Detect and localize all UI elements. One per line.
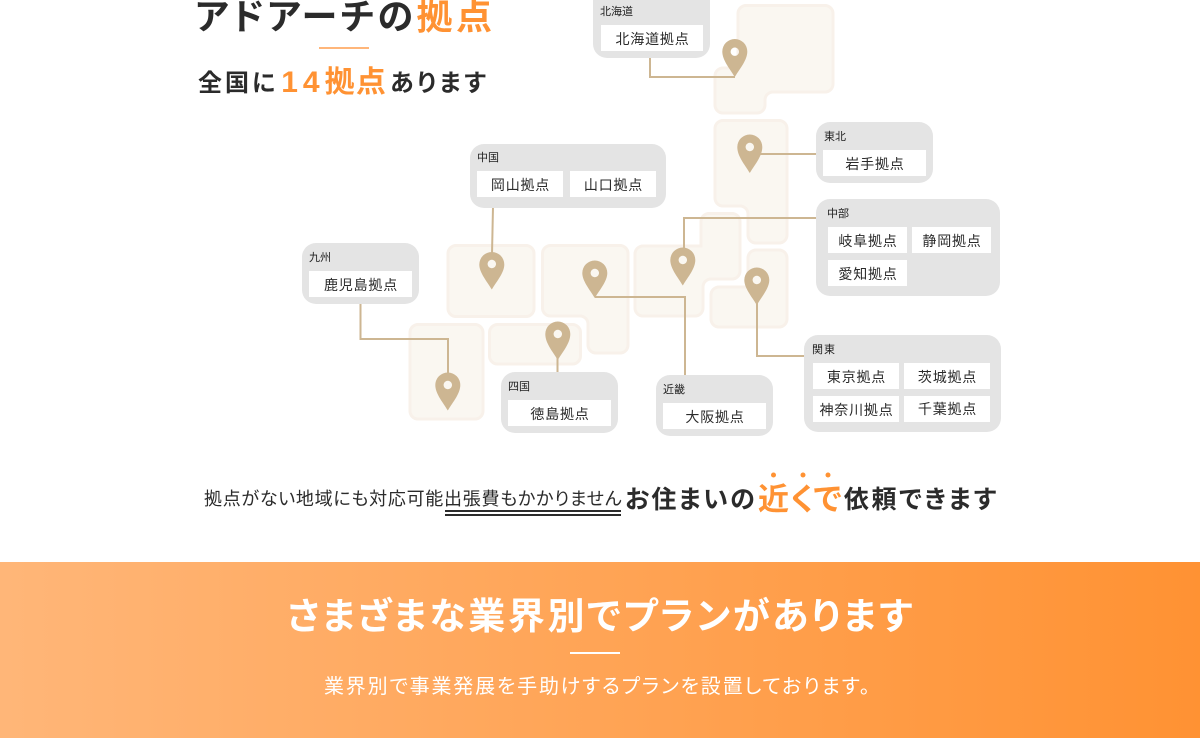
pin tohoku xyxy=(737,134,762,173)
subtitle: 14 locations: あります xyxy=(390,70,489,97)
office: iwate xyxy=(823,150,926,176)
office: aichi: 愛知拠点 xyxy=(838,266,898,282)
banner text: 業界別で事業発展を手助けするプランを設置しております。 xyxy=(324,676,871,698)
line chubu xyxy=(684,218,818,250)
label: shikoku: 四国 xyxy=(508,381,530,393)
office: kagoshima xyxy=(309,271,412,297)
line kanto xyxy=(757,300,805,356)
kyushu shape xyxy=(410,324,483,419)
double underline xyxy=(445,510,621,516)
region shapes xyxy=(410,6,833,419)
chubu shape xyxy=(635,214,740,316)
office: kagoshima: 鹿児島拠点 xyxy=(324,277,398,293)
banner: plans by industry xyxy=(0,562,1200,738)
pin chugoku xyxy=(479,252,504,290)
office: shizuoka xyxy=(912,227,991,253)
pin kanto xyxy=(744,268,769,305)
pin kinki xyxy=(582,260,607,298)
line chugoku xyxy=(492,207,493,254)
label: chubu: 中部 xyxy=(827,208,849,220)
connector lines xyxy=(360,57,818,376)
office: chiba xyxy=(904,396,990,422)
subtitle: 14 locations xyxy=(198,66,489,99)
label: kyushu: 九州 xyxy=(309,252,331,264)
office: chiba: 千葉拠点 xyxy=(918,401,977,417)
panel: kanto xyxy=(804,335,1001,432)
pin chubu xyxy=(670,247,695,286)
office: osaka: 大阪拠点 xyxy=(685,409,745,425)
label: hokkaido: 北海道 xyxy=(600,6,633,18)
subtitle: 14 locations: 14拠点 xyxy=(281,66,387,99)
pin hokkaido xyxy=(722,39,747,77)
line kinki xyxy=(595,297,685,376)
kanto shape xyxy=(711,250,787,327)
panel: kyushu xyxy=(302,243,419,304)
office: hokkaido: 北海道拠点 xyxy=(616,31,690,47)
office: osaka xyxy=(663,403,766,429)
subtitle: 14 locations: 全国に xyxy=(198,70,278,97)
banner divider xyxy=(570,652,620,654)
office: shizuoka: 静岡拠点 xyxy=(922,233,982,249)
office: okayama: 岡山拠点 xyxy=(491,177,550,193)
shikoku shape xyxy=(490,324,580,364)
office: hokkaido xyxy=(601,25,703,51)
label: kinki: 近畿 xyxy=(663,384,685,396)
label: chugoku: 中国 xyxy=(477,152,499,164)
office: yamaguchi xyxy=(570,171,656,197)
title divider xyxy=(319,47,369,49)
panel: chubu xyxy=(816,199,1000,296)
note: request nearby xyxy=(625,482,999,516)
location pins xyxy=(435,39,769,410)
banner heading: さまざまな業界別でプランがあります xyxy=(287,596,915,637)
office: tokyo xyxy=(813,363,899,389)
label: tohoku: 東北 xyxy=(824,131,846,143)
chugoku shape xyxy=(448,246,534,316)
line shikoku xyxy=(556,355,558,376)
hokkaido shape xyxy=(715,6,833,113)
panel: tohoku xyxy=(816,122,933,183)
line hokkaido xyxy=(650,57,735,77)
line tohoku xyxy=(758,153,817,155)
office: iwate: 岩手拠点 xyxy=(845,156,905,172)
office: okayama xyxy=(477,171,563,197)
line kyushu xyxy=(360,303,448,374)
office: kanagawa: 神奈川拠点 xyxy=(820,402,894,418)
office: aichi xyxy=(828,260,907,286)
office: tokushima: 徳島拠点 xyxy=(530,406,590,422)
office: yamaguchi: 山口拠点 xyxy=(584,177,643,193)
office: gifu xyxy=(828,227,907,253)
note: request nearby: 依頼できます xyxy=(844,486,999,514)
panel: kinki xyxy=(656,375,773,436)
office: tokushima xyxy=(508,400,611,426)
kinki shape xyxy=(542,246,628,353)
pin shikoku xyxy=(545,322,570,360)
office: ibaraki xyxy=(904,363,990,389)
panel: shikoku xyxy=(501,372,618,433)
office: gifu: 岐阜拠点 xyxy=(838,233,898,249)
office: kanagawa xyxy=(813,396,899,422)
note: no extra travel cost: 拠点がない地域にも対応可能出張費もかかりません xyxy=(204,489,622,509)
office: tokyo: 東京拠点 xyxy=(827,369,886,385)
note: request nearby: お住まいの xyxy=(625,486,757,514)
panel: hokkaido xyxy=(593,0,710,58)
pin kyushu xyxy=(435,372,460,410)
label: kanto: 関東 xyxy=(812,344,836,356)
tohoku shape xyxy=(715,120,787,243)
note: request nearby: 近くで xyxy=(758,482,843,516)
office: ibaraki: 茨城拠点 xyxy=(918,369,977,385)
panel: chugoku xyxy=(470,144,666,208)
